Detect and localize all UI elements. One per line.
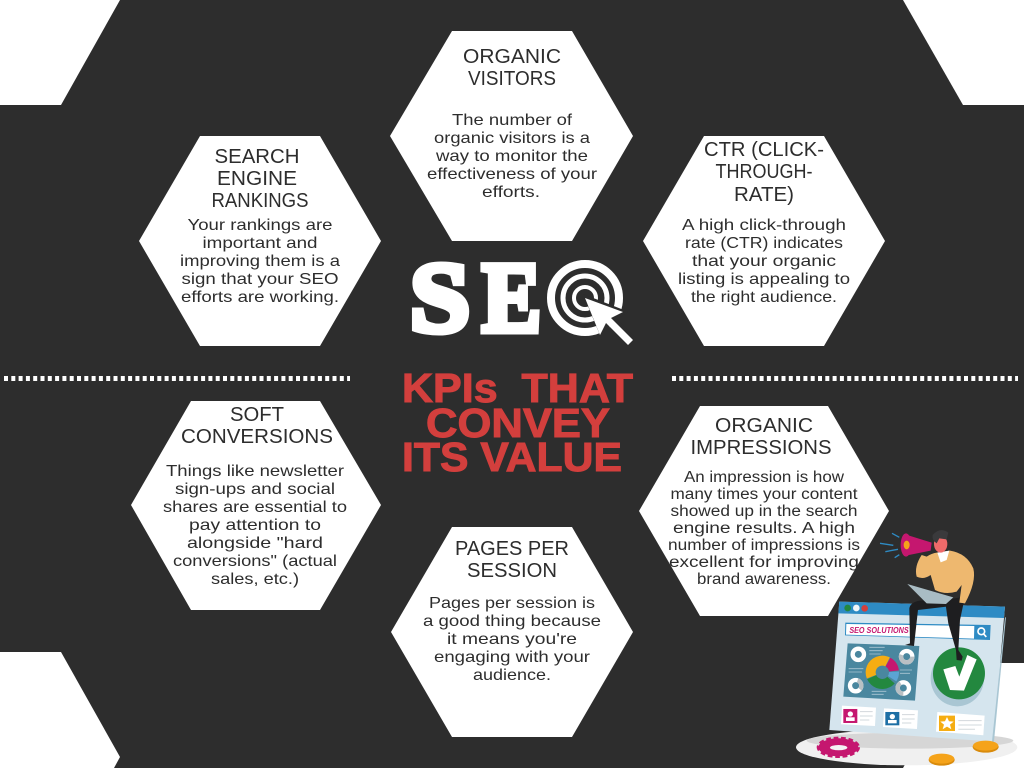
panel: soft conversions: shares are essential to <box>163 499 347 516</box>
panel: pages per session: engaging with your <box>434 649 591 666</box>
panel: soft conversions: alongside "hard <box>187 535 323 552</box>
panel: pages per session <box>391 527 633 737</box>
icon: green check badge <box>931 647 985 706</box>
panel: soft conversions: sales, etc.) <box>211 571 299 588</box>
illustration: SEO solutions browser with person <box>796 530 1017 766</box>
panel: search engine rankings: RANKINGS <box>212 190 308 212</box>
person with megaphone and laptop <box>880 530 974 661</box>
panel: soft conversions: CONVERSIONS <box>181 426 333 448</box>
panel: pages per session: Pages per session is <box>429 595 595 612</box>
panel: organic visitors: ORGANIC <box>463 46 561 68</box>
panel: search engine rankings: ENGINE <box>217 168 297 190</box>
panel: search engine rankings <box>139 136 381 346</box>
panel: pages per session: it means you're <box>447 631 577 648</box>
result cards <box>841 706 985 735</box>
panel: ctr <box>643 136 885 346</box>
browser window <box>829 602 1006 742</box>
panel: ctr: listing is appealing to <box>678 271 850 288</box>
panel: soft conversions: conversions" (actual <box>173 553 337 570</box>
title: SEO logo: E <box>482 242 541 353</box>
ground shadow <box>796 729 1017 765</box>
panel: organic impressions: brand awareness. <box>697 571 831 588</box>
panel: organic visitors: organic visitors is a <box>434 130 590 147</box>
panel: organic impressions: excellent for improving <box>669 554 859 571</box>
panel: search engine rankings: sign that your SEO <box>182 271 338 288</box>
heading: KPIs that convey its value <box>402 365 633 480</box>
panel: ctr: THROUGH- <box>716 161 812 183</box>
panel: ctr: A high click-through <box>682 217 846 234</box>
panel: soft conversions: Things like newsletter <box>166 463 345 480</box>
panel: organic impressions: many times your content <box>670 486 858 503</box>
panel: organic impressions: showed up in the search <box>670 503 858 520</box>
panel: organic visitors <box>390 31 633 241</box>
panel: ctr: RATE) <box>734 184 794 206</box>
panel: ctr: that your organic <box>692 253 836 270</box>
panel: search engine rankings: important and <box>202 235 318 252</box>
panel: search engine rankings: Your rankings are <box>188 217 333 234</box>
panel: organic visitors: efforts. <box>482 184 540 201</box>
browser window: SEO SOLUTIONS <box>849 626 909 635</box>
title: SEO logo: S <box>410 242 470 353</box>
panel: pages per session: PAGES PER <box>455 538 569 560</box>
panel: organic visitors: The number of <box>452 112 573 129</box>
icon: coins <box>929 741 999 766</box>
icon: megaphone <box>880 533 932 558</box>
panel: ctr: rate (CTR) indicates <box>685 235 843 252</box>
panel: soft conversions: SOFT <box>230 404 284 426</box>
panel: organic visitors: effectiveness of your <box>427 166 598 183</box>
panel: organic visitors: way to monitor the <box>435 148 588 165</box>
heading: KPIs that convey its value: KPIs THAT <box>402 365 633 411</box>
panel: pages per session: a good thing because <box>423 613 601 630</box>
panel: organic impressions: engine results. A high <box>673 520 855 537</box>
panel: ctr: CTR (CLICK- <box>704 139 824 161</box>
panel: search engine rankings: SEARCH <box>214 146 300 168</box>
panel: pages per session: audience. <box>473 667 551 684</box>
panel: organic impressions <box>639 406 889 616</box>
panel: organic impressions: An impression is how <box>684 469 845 486</box>
panel: search engine rankings: improving them is a <box>180 253 340 270</box>
heading: KPIs that convey its value: ITS VALUE <box>402 434 622 480</box>
panel: soft conversions <box>131 401 381 610</box>
panel: organic impressions: number of impressions is <box>668 537 860 554</box>
panel: search engine rankings: efforts are working. <box>181 289 339 306</box>
panel: organic visitors: VISITORS <box>468 68 556 90</box>
icon: target with cursor <box>551 264 636 346</box>
panel: pages per session: SESSION <box>467 560 557 582</box>
panel: soft conversions: pay attention to <box>189 517 321 534</box>
panel: soft conversions: sign-ups and social <box>175 481 335 498</box>
icon: gear <box>818 738 858 756</box>
dashboard chart <box>843 643 919 701</box>
panel: organic impressions: ORGANIC <box>715 415 813 437</box>
title: SEO logo <box>410 242 636 353</box>
panel: ctr: the right audience. <box>691 289 837 306</box>
heading: KPIs that convey its value: CONVEY <box>426 400 610 446</box>
panel: organic impressions: IMPRESSIONS <box>690 437 832 459</box>
